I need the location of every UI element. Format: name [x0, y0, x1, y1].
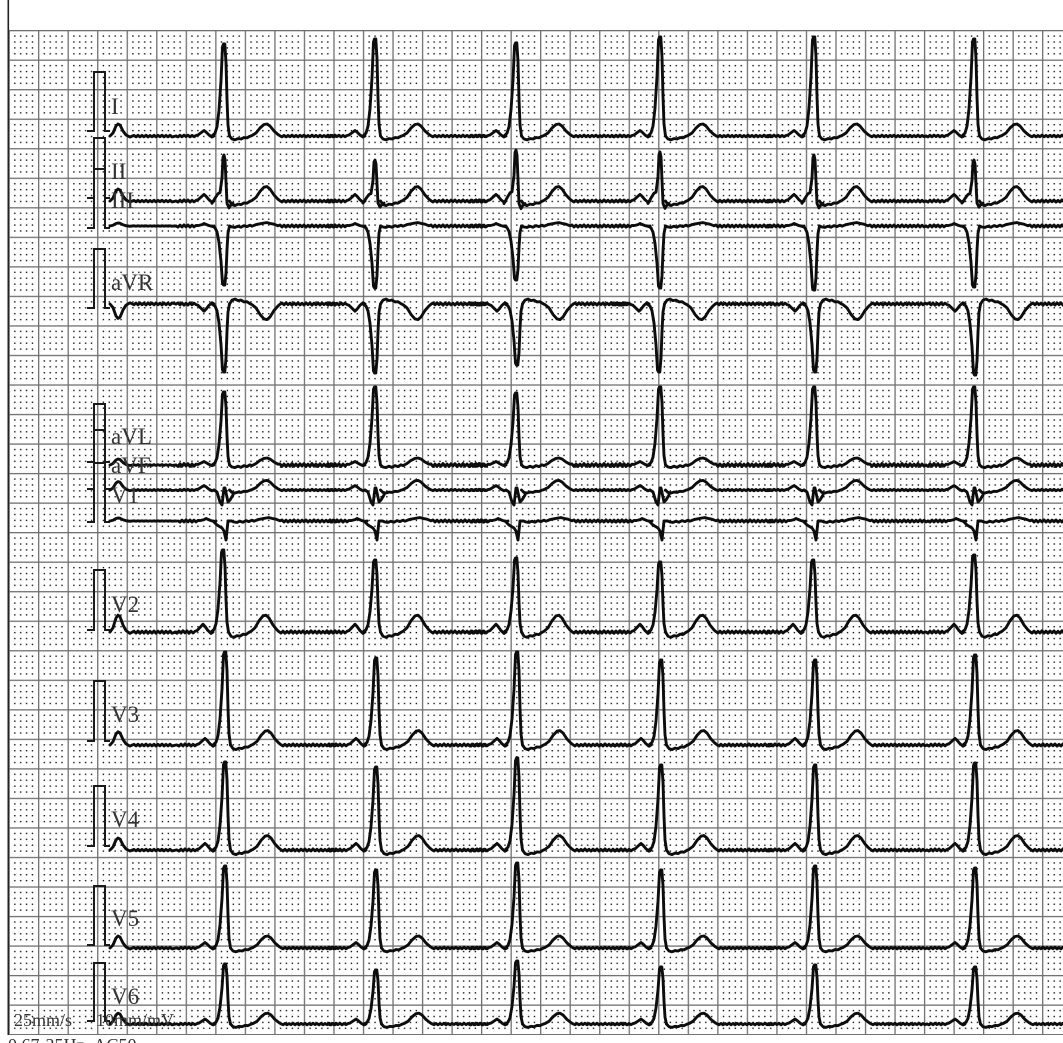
- lead V2 label: V2: [111, 592, 139, 617]
- lead aVF trace: [87, 430, 1063, 505]
- lead II trace: [87, 138, 1063, 209]
- paper speed note: 25mm/s: [14, 1010, 72, 1030]
- lead V1 label: V1: [111, 483, 139, 508]
- lead II label: II: [111, 159, 126, 184]
- gain note: 10mm/mV: [96, 1010, 174, 1030]
- lead V2 trace: [87, 550, 1063, 637]
- lead V5 trace: [87, 863, 1063, 952]
- lead aVF label: aVF: [111, 453, 151, 478]
- lead I label: I: [111, 94, 119, 119]
- lead III trace: [87, 169, 1063, 290]
- lead III label: III: [111, 188, 134, 213]
- lead I trace: [87, 37, 1063, 140]
- left border line: [8, 0, 9, 1035]
- lead aVL label: aVL: [111, 424, 152, 449]
- lead aVL trace: [87, 387, 1063, 468]
- lead V3 label: V3: [111, 702, 139, 727]
- lead aVR label: aVR: [111, 270, 154, 295]
- lead V4 label: V4: [111, 807, 140, 832]
- lead V6 label: V6: [111, 984, 139, 1009]
- lead V5 label: V5: [111, 906, 139, 931]
- lead aVR trace: [87, 249, 1063, 375]
- lead V3 trace: [87, 652, 1063, 750]
- lead V1 trace: [87, 463, 1063, 540]
- lead V6 trace: [87, 961, 1063, 1027]
- lead V4 trace: [87, 758, 1063, 855]
